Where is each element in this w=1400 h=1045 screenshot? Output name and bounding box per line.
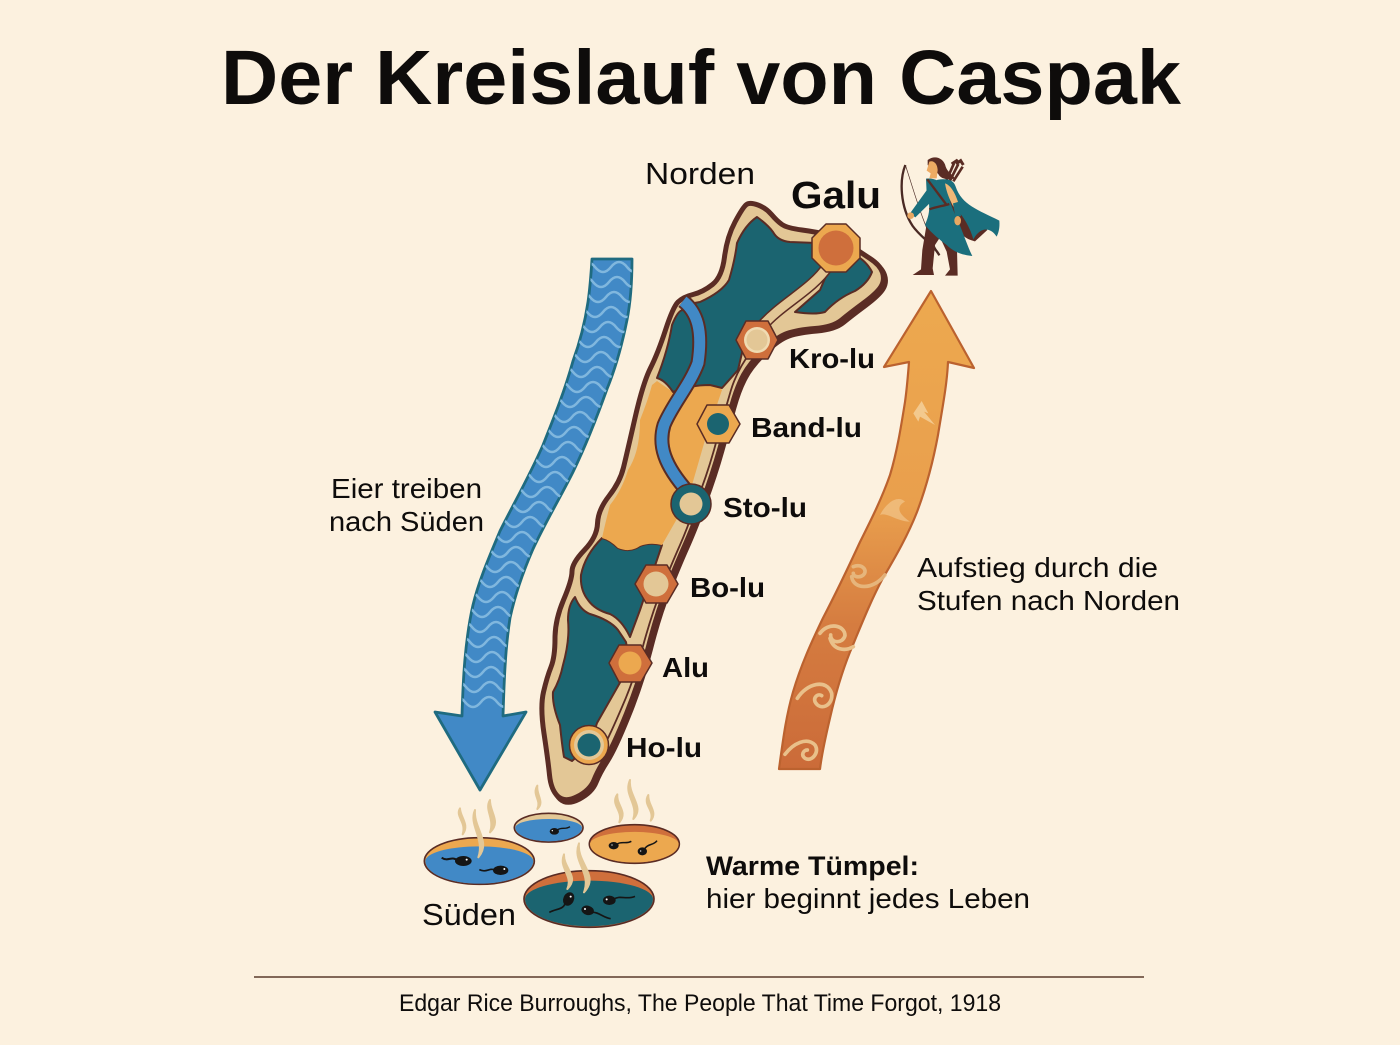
pond: blue large — [424, 838, 534, 884]
bracer — [953, 202, 961, 217]
text: ascent through the stages — [917, 552, 1180, 616]
label: Sto-lu: Sto-lu — [723, 492, 807, 523]
road edge line — [603, 350, 752, 748]
bow — [902, 165, 939, 255]
node: Ho-lu — [570, 726, 608, 764]
region: southern lowlands — [553, 597, 630, 761]
node: Band-lu — [697, 405, 740, 443]
text: warm pools — [706, 851, 1030, 914]
hair — [928, 157, 955, 179]
pond: teal — [524, 871, 654, 927]
road: Galu to Kro-lu — [762, 266, 828, 326]
pond: blue small — [514, 813, 583, 842]
left hand — [907, 212, 914, 219]
label: Norden: Norden — [645, 156, 755, 191]
text: eggs drift south: Eier treiben — [331, 473, 482, 504]
cape outer — [937, 179, 999, 239]
right hand — [954, 216, 961, 225]
text: warm pools: hier beginnt jedes Leben — [706, 883, 1030, 914]
map: island of Caspak — [542, 203, 885, 802]
title: Der Kreislauf von Caspak — [221, 35, 1181, 121]
pond: orange — [589, 825, 679, 863]
label: Bo-lu: Bo-lu — [690, 572, 765, 603]
arrow: ascent to the north — [779, 291, 974, 769]
face — [927, 161, 938, 178]
region: central plains — [602, 381, 722, 550]
text: eggs drift south: nach Süden — [329, 506, 484, 537]
belt and strap — [927, 179, 949, 209]
label: Ho-lu: Ho-lu — [626, 732, 702, 763]
right arm — [945, 183, 959, 207]
tunic — [925, 178, 972, 256]
river — [662, 301, 700, 492]
region: middle lowlands — [581, 538, 662, 637]
node: Sto-lu — [671, 484, 711, 524]
text: eggs drift south — [329, 473, 484, 537]
legs — [913, 224, 958, 276]
cape inner — [947, 187, 987, 241]
label: Kro-lu: Kro-lu — [789, 343, 875, 374]
arrow: eggs drifting south — [434, 258, 634, 792]
left arm — [910, 189, 931, 217]
ponds: warm pools — [424, 780, 679, 927]
bowstring — [905, 165, 939, 255]
text: ascent through the stages: Stufen nach Norden — [917, 585, 1180, 616]
label: Süden: Süden — [422, 897, 516, 932]
node: Galu — [812, 224, 860, 272]
text: ascent through the stages: Aufstieg durch die — [917, 552, 1158, 583]
label: Galu: Galu — [791, 175, 881, 217]
region: northern lobe — [795, 252, 872, 314]
node: Bo-lu — [635, 565, 678, 603]
source line: Edgar Rice Burroughs, The People That Time Forgot, 1918 — [399, 990, 1001, 1017]
steam — [459, 780, 653, 892]
quiver arrows — [947, 161, 963, 181]
node: Kro-lu — [736, 321, 778, 359]
icon: archer — [902, 157, 999, 276]
label: Band-lu: Band-lu — [751, 412, 862, 443]
region: northern highlands — [657, 217, 832, 392]
text: warm pools: Warme Tümpel: — [706, 851, 919, 881]
node: Alu — [609, 645, 652, 682]
label: Alu: Alu — [662, 652, 709, 683]
